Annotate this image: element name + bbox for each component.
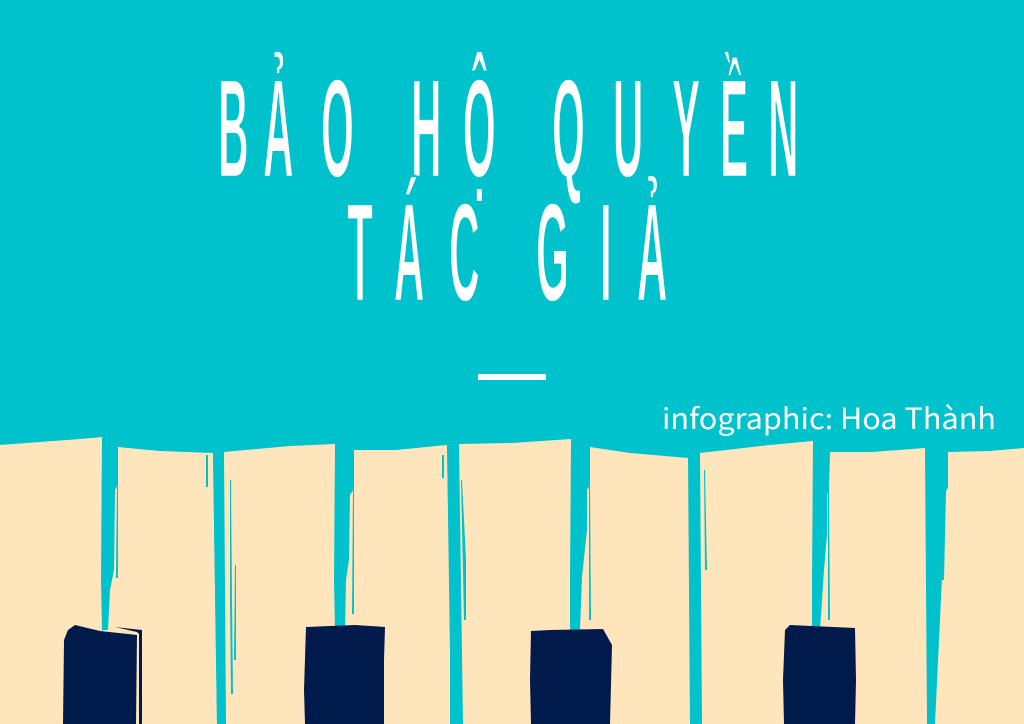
gaps between keys (101, 437, 948, 724)
black key 1 (63, 625, 142, 724)
black key 4 (783, 625, 856, 724)
black key 2 (304, 625, 385, 724)
credit text: infographic: Hoa Thành (662, 396, 996, 438)
piano white keys (0, 437, 1024, 724)
title: BẢO HỘ QUYỀN (218, 51, 799, 208)
black key 3 (530, 629, 612, 724)
bottom-running gaps (213, 444, 702, 724)
piano black keys (63, 625, 856, 724)
divider (478, 374, 546, 380)
title: TÁC GIẢ (347, 175, 667, 332)
key scratches (116, 484, 118, 578)
title (218, 51, 799, 332)
